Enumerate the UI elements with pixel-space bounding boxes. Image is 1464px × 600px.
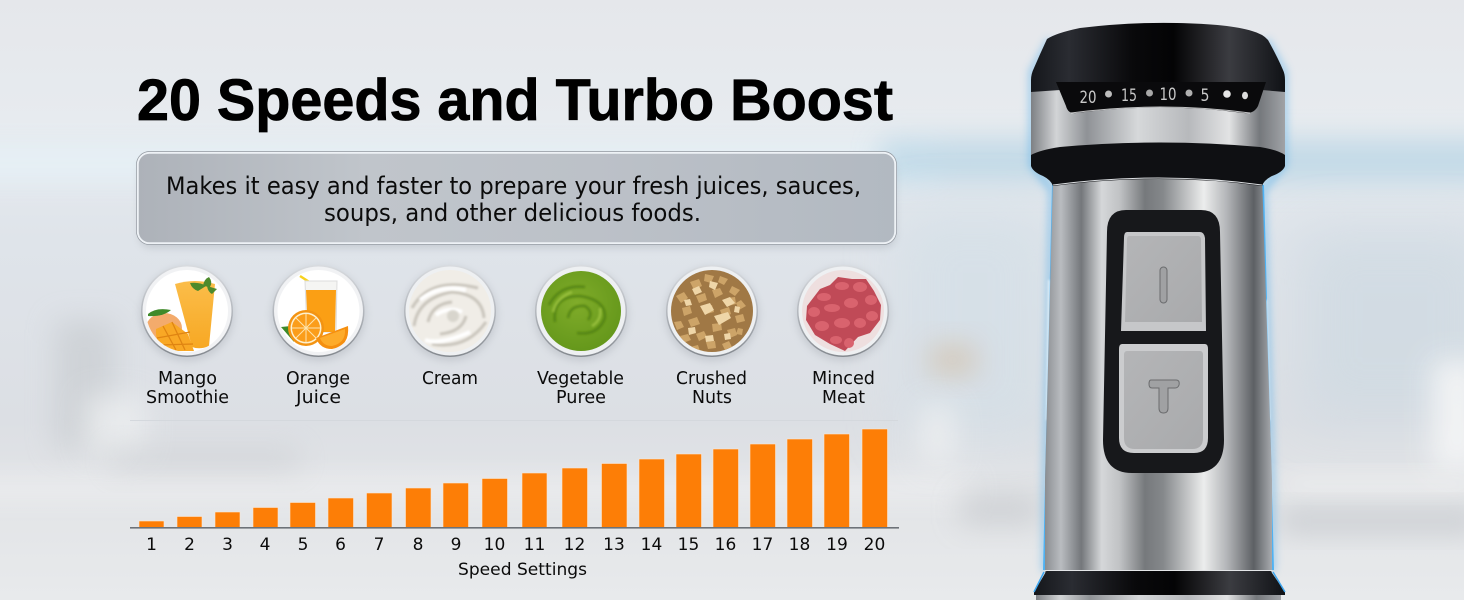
axis numbers: 3 xyxy=(222,535,233,555)
food item: mango smoothie xyxy=(140,265,234,408)
label: Cream xyxy=(422,368,478,389)
label xyxy=(286,368,350,408)
label xyxy=(676,368,747,408)
button housing xyxy=(1103,210,1224,473)
food item: crushed nuts xyxy=(665,265,759,408)
bar chart: speed settings xyxy=(130,429,899,580)
axis numbers: 8 xyxy=(413,535,423,555)
axis numbers: 10 xyxy=(484,535,505,555)
blurred kitchen background xyxy=(0,134,1464,539)
label: Smoothie xyxy=(146,387,229,408)
title: 20 Speeds and Turbo Boost xyxy=(137,68,893,133)
blue edge glow xyxy=(1032,40,1284,572)
speed dial window: 10 xyxy=(1160,85,1176,105)
axis numbers: 14 xyxy=(641,535,662,555)
axis numbers: 13 xyxy=(603,535,625,555)
speed dial window xyxy=(1056,82,1266,113)
food item: vegetable puree xyxy=(534,265,628,408)
axis numbers: 17 xyxy=(752,535,773,555)
metal handle body xyxy=(1045,175,1272,575)
label: Juice xyxy=(295,387,341,408)
metal speed ring xyxy=(1031,88,1285,158)
lower metal shaft xyxy=(1036,595,1281,600)
axis numbers: 7 xyxy=(374,535,384,555)
label: Puree xyxy=(556,387,606,408)
axis numbers: 6 xyxy=(335,535,346,555)
speed dial window: 15 xyxy=(1121,86,1137,106)
axis numbers: 15 xyxy=(678,535,699,555)
label: Mango xyxy=(158,368,217,389)
axis numbers: 1 xyxy=(146,535,157,555)
speed dial window: 20 xyxy=(1080,88,1096,108)
food item: cream xyxy=(403,265,497,389)
axis numbers: 4 xyxy=(260,535,270,555)
label: Nuts xyxy=(692,387,732,408)
axis numbers: 16 xyxy=(715,535,736,555)
label: Vegetable xyxy=(537,368,624,389)
label xyxy=(537,368,624,408)
label: Crushed xyxy=(676,368,747,389)
bars xyxy=(139,429,888,528)
black top cap xyxy=(1031,23,1285,92)
axis numbers: 20 xyxy=(864,535,885,555)
lower black collar xyxy=(1034,570,1285,600)
food item: orange juice xyxy=(272,265,366,408)
speed dial window: 5 xyxy=(1200,86,1210,106)
axis numbers xyxy=(146,535,885,555)
black collar xyxy=(1031,142,1285,186)
axis numbers: 9 xyxy=(451,535,461,555)
label xyxy=(812,368,875,408)
turbo button xyxy=(1119,344,1208,453)
subtitle text: soups, and other delicious foods. xyxy=(324,199,701,227)
axis numbers: 5 xyxy=(298,535,308,555)
axis title: Speed Settings xyxy=(458,560,587,580)
subtitle panel xyxy=(136,152,896,248)
power button xyxy=(1121,232,1206,331)
axis numbers: 18 xyxy=(789,535,810,555)
label xyxy=(146,368,229,408)
food item: minced meat xyxy=(796,265,890,408)
axis numbers: 11 xyxy=(524,535,545,555)
axis numbers: 2 xyxy=(184,535,195,555)
product: immersion blender xyxy=(1031,23,1285,600)
subtitle text xyxy=(166,172,861,227)
label: Orange xyxy=(286,368,350,389)
label: Minced xyxy=(812,368,875,389)
subtitle text: Makes it easy and faster to prepare your fresh juices, sauces, xyxy=(166,172,861,200)
label: Meat xyxy=(822,387,865,408)
axis numbers: 19 xyxy=(826,535,848,555)
axis numbers: 12 xyxy=(564,535,585,555)
